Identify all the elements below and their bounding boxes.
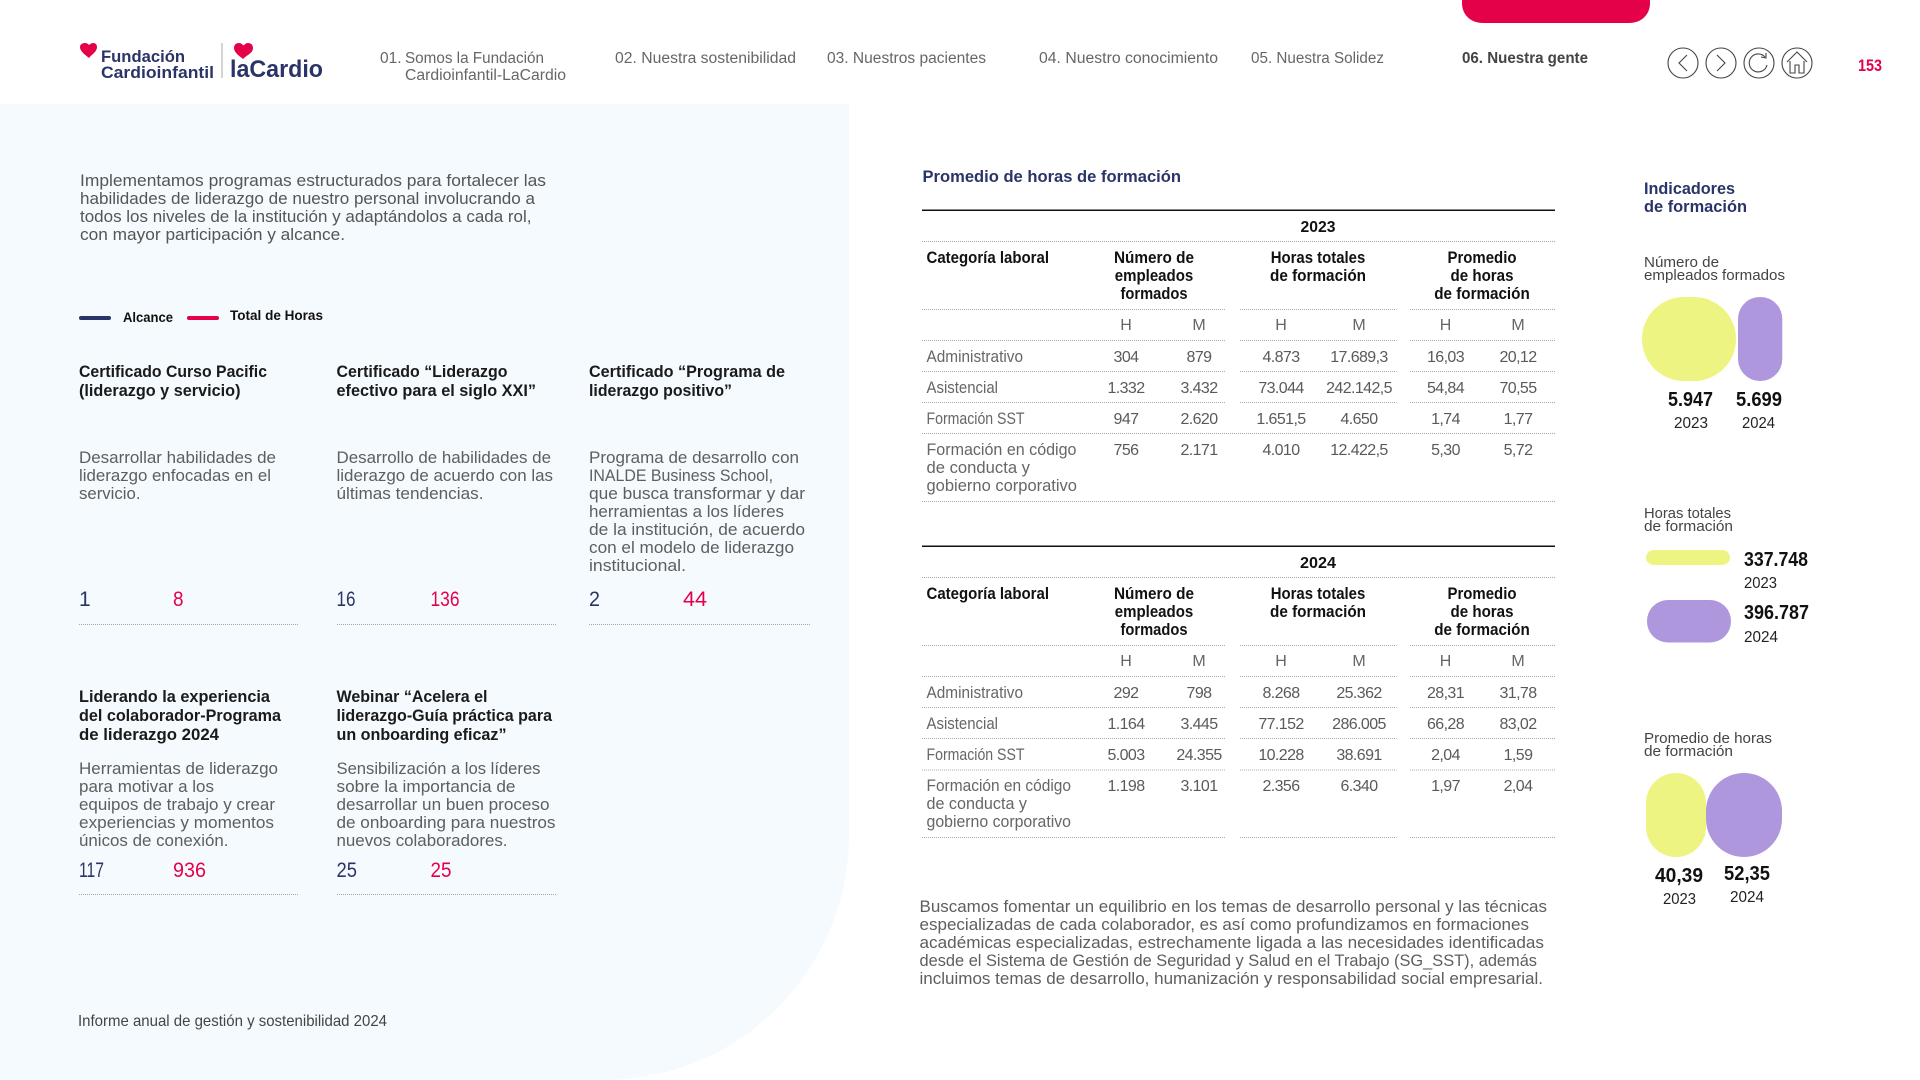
closing paragraph: Buscamos fomentar un equilibrio en los temas de desarrollo personal y las técnicas [920, 897, 1547, 916]
table 2023: empleados [1115, 267, 1193, 285]
table 2023: de formación [1434, 285, 1530, 303]
heading: indicadores [1644, 179, 1747, 216]
table 2023: de horas [1450, 267, 1514, 285]
table 2023: Número de [1114, 249, 1194, 267]
table 2023: H [1120, 317, 1132, 334]
logo: Fundación [101, 47, 185, 66]
table 2024: 1.198 [1107, 778, 1145, 795]
navigation menu: Somos la Fundación [405, 50, 544, 67]
navigation menu: Cardioinfantil-LaCardio [405, 67, 566, 84]
indicator: número de empleados formados: Número de [1644, 254, 1719, 271]
table 2023: M [1511, 317, 1525, 334]
program: Liderazgo positivo: de la institución, de acuerdo [589, 520, 805, 539]
table 2024: 3.445 [1180, 716, 1218, 733]
navigation menu: 06. Nuestra gente [1462, 50, 1588, 67]
heading: indicadores: de formación [1644, 197, 1747, 216]
program: Liderazgo positivo: liderazgo positivo” [589, 381, 732, 400]
indicator: horas totales de formación: de formación [1644, 518, 1733, 535]
table 2023: 70,55 [1499, 380, 1537, 397]
program: Liderazgo efectivo: Certificado “Liderazgo [336, 362, 508, 381]
indicator: horas totales de formación: 2024 [1744, 629, 1778, 646]
indicator: promedio de horas de formación: 40,39 [1655, 865, 1703, 887]
table 2023: formados [1120, 285, 1188, 303]
navigation menu: 02. Nuestra sostenibilidad [615, 50, 796, 67]
table 2024: 31,78 [1499, 685, 1537, 702]
navigation menu: 04. Nuestro conocimiento [1039, 50, 1218, 67]
table 2023: M [1352, 317, 1366, 334]
navigation menu: 03. Nuestros pacientes [827, 50, 986, 67]
heading: promedio: Promedio de horas de formación [922, 167, 1181, 186]
table 2024: 1,97 [1431, 778, 1461, 795]
table 2024: gobierno corporativo [926, 813, 1071, 831]
table 2024: H [1275, 653, 1287, 670]
table 2024: 77.152 [1258, 716, 1304, 733]
indicator: número de empleados formados: 5.947 [1668, 389, 1713, 411]
table 2023: 2.171 [1180, 442, 1218, 459]
page number: 153 [1858, 56, 1882, 75]
program: Liderazgo positivo: 44 [683, 588, 707, 611]
program: Liderando la experiencia: equipos de trabajo y crear [79, 795, 275, 814]
table 2024: 2024 [1300, 555, 1336, 572]
intro text: con mayor participación y alcance. [80, 225, 345, 244]
program: Webinar Acelera el liderazgo: 25 [336, 859, 357, 882]
closing paragraph: incluimos temas de desarrollo, humanización y responsabilidad social empresarial. [920, 969, 1543, 988]
program: Liderazgo positivo: que busca transformar y dar [589, 484, 805, 503]
indicator: promedio de horas de formación: Promedio de horas [1644, 730, 1772, 747]
table 2023: 242.142,5 [1326, 380, 1393, 397]
closing paragraph: académicas especializadas, estrechamente ligada a las necesidades identificadas [920, 933, 1544, 952]
program: Liderazgo efectivo: últimas tendencias. [336, 484, 484, 503]
table 2024: 38.691 [1336, 747, 1382, 764]
table 2023: gobierno corporativo [926, 477, 1077, 495]
table 2024: 292 [1114, 685, 1139, 702]
program: Curso Pacific: liderazgo enfocadas en el [79, 466, 271, 485]
program: Liderazgo positivo: con el modelo de liderazgo [589, 538, 794, 557]
table 2024: 24.355 [1176, 747, 1222, 764]
intro text: habilidades de liderazgo de nuestro personal involucrando a [80, 189, 536, 208]
table 2024: 2.356 [1262, 778, 1300, 795]
table 2023: 947 [1114, 411, 1139, 428]
table 2023: Administrativo [926, 348, 1023, 366]
footer: Informe anual de gestión y sostenibilidad 2024 [78, 1013, 387, 1030]
program: Webinar Acelera el liderazgo [336, 687, 556, 894]
program: Liderazgo positivo: Certificado “Programa de [589, 362, 785, 381]
table 2023: 17.689,3 [1330, 349, 1388, 366]
indicator: horas totales de formación [1644, 505, 1809, 646]
table 2024: 25.362 [1336, 685, 1382, 702]
program: Curso Pacific: 1 [79, 588, 91, 611]
table 2024: 2,04 [1504, 778, 1533, 795]
program: Liderando la experiencia: 936 [173, 859, 206, 882]
table 2023: de formación [1270, 267, 1366, 285]
table 2024: Categoría laboral [926, 585, 1049, 603]
indicator: promedio de horas de formación: 2024 [1730, 889, 1764, 906]
table 2023: 1,74 [1431, 411, 1461, 428]
table 2024: 8.268 [1262, 685, 1300, 702]
table 2023: 1,77 [1504, 411, 1533, 428]
indicator: horas totales de formación: Horas totales [1644, 505, 1731, 522]
program: Liderazgo efectivo: 16 [336, 588, 356, 611]
table 2024: 286.005 [1332, 716, 1387, 733]
table 2024: de formación [1270, 603, 1366, 621]
program: Liderando la experiencia: para motivar a los [79, 777, 214, 796]
table 2024: 66,28 [1427, 716, 1465, 733]
table 2024: formados [1120, 621, 1188, 639]
table 2023: Formación en código [926, 441, 1076, 459]
table 2024: 1.164 [1107, 716, 1145, 733]
program: Curso Pacific: (liderazgo y servicio) [79, 381, 240, 400]
program: Liderazgo efectivo: liderazgo de acuerdo con las [336, 466, 553, 485]
program: Liderando la experiencia: 117 [79, 859, 104, 882]
table 2024: Administrativo [926, 684, 1023, 702]
table 2024: 10.228 [1258, 747, 1304, 764]
table 2024: M [1511, 653, 1525, 670]
table 2023: 879 [1187, 349, 1212, 366]
heading: indicadores: Indicadores [1644, 179, 1735, 198]
program: Liderazgo positivo: INALDE Business School, [589, 466, 773, 485]
indicator: horas totales de formación: 337.748 [1744, 549, 1808, 571]
table 2024: 28,31 [1427, 685, 1465, 702]
closing paragraph: desde el Sistema de Gestión de Seguridad y Salud en el Trabajo (SG_SST), además [920, 951, 1537, 970]
program: Curso Pacific: 8 [173, 588, 184, 611]
table 2024: de conducta y [926, 795, 1028, 813]
program: Liderazgo efectivo: Desarrollo de habilidades de [336, 448, 551, 467]
table 2024: 5.003 [1107, 747, 1145, 764]
table 2023: 756 [1114, 442, 1139, 459]
table 2023: 1.332 [1107, 380, 1145, 397]
program: Liderando la experiencia: Herramientas de liderazgo [79, 759, 278, 778]
closing paragraph [920, 897, 1547, 988]
logo: Cardioinfantil [101, 63, 214, 82]
table 2024: 1,59 [1504, 747, 1533, 764]
program: Liderando la experiencia: experiencias y momentos [79, 813, 274, 832]
table 2024: Asistencial [926, 715, 998, 733]
legend [79, 308, 323, 325]
legend: Alcance [123, 310, 173, 325]
program: Liderando la experiencia: del colaborador-Programa [79, 706, 282, 725]
navigation menu: 01. [380, 50, 402, 67]
closing paragraph: especializadas de cada colaborador, es así como profundizamos en formaciones [920, 915, 1529, 934]
program: Webinar Acelera el liderazgo: sobre la importancia de [336, 777, 516, 796]
program: Liderazgo positivo: Programa de desarrollo con [589, 448, 799, 467]
navigation menu [380, 50, 1588, 84]
table 2023: 16,03 [1427, 349, 1465, 366]
navigation menu: 05. Nuestra Solidez [1251, 50, 1384, 67]
table 2024: de horas [1450, 603, 1514, 621]
indicator: promedio de horas de formación [1644, 730, 1782, 908]
table 2024: H [1120, 653, 1132, 670]
table 2024: M [1192, 653, 1206, 670]
program: Curso Pacific: Certificado Curso Pacific [79, 362, 267, 381]
table 2023 [922, 210, 1555, 502]
program: Webinar Acelera el liderazgo: desarrollar un buen proceso [336, 795, 550, 814]
indicator: número de empleados formados: empleados formados [1644, 267, 1785, 284]
table 2023: Categoría laboral [926, 249, 1049, 267]
program: Webinar Acelera el liderazgo: de onboarding para nuestros [336, 813, 556, 832]
program: Liderando la experiencia: únicos de conexión. [79, 831, 228, 850]
table 2024: 798 [1187, 685, 1212, 702]
table 2023: M [1192, 317, 1206, 334]
table 2023: 2.620 [1180, 411, 1218, 428]
table 2023: 4.873 [1262, 349, 1300, 366]
table 2023: 2023 [1300, 219, 1336, 236]
intro text: todos los niveles de la institución y adaptándolos a cada rol, [80, 207, 532, 226]
table 2024: Formación en código [926, 777, 1071, 795]
table 2023: 5,72 [1504, 442, 1533, 459]
program: Liderazgo efectivo [336, 362, 556, 624]
table 2024: Horas totales [1271, 585, 1365, 603]
intro text [80, 171, 546, 244]
table 2024: de formación [1434, 621, 1530, 639]
table 2023: 1.651,5 [1256, 411, 1306, 428]
table 2023: 4.650 [1340, 411, 1378, 428]
table 2024: 2,04 [1431, 747, 1461, 764]
program: Liderazgo efectivo: 136 [430, 588, 460, 611]
table 2024: H [1440, 653, 1451, 670]
program: Liderazgo positivo: 2 [589, 588, 600, 611]
indicator: número de empleados formados: 2023 [1674, 415, 1708, 432]
indicator: número de empleados formados: 2024 [1742, 415, 1775, 432]
program: Webinar Acelera el liderazgo: nuevos colaboradores. [336, 831, 508, 850]
program: Webinar Acelera el liderazgo: 25 [430, 859, 452, 882]
program: Liderazgo positivo: herramientas a los líderes [589, 502, 784, 521]
program: Liderando la experiencia: Liderando la experiencia [79, 687, 271, 706]
program: Curso Pacific [79, 362, 299, 624]
legend: Total de Horas [230, 308, 323, 323]
program: Liderando la experiencia [79, 687, 299, 894]
logo [80, 43, 323, 83]
intro text: Implementamos programas estructurados para fortalecer las [80, 171, 546, 190]
table 2023: Horas totales [1271, 249, 1365, 267]
program: Webinar Acelera el liderazgo: liderazgo-Guía práctica para [336, 706, 553, 725]
indicator: número de empleados formados [1642, 254, 1785, 432]
table 2024: Promedio [1448, 585, 1516, 603]
table 2023: Promedio [1448, 249, 1516, 267]
table 2024: M [1352, 653, 1366, 670]
icon: home [1782, 48, 1812, 78]
program: Curso Pacific: Desarrollar habilidades de [79, 448, 276, 467]
table 2024 [922, 546, 1555, 838]
table 2023: de conducta y [926, 459, 1031, 477]
program: Curso Pacific: servicio. [79, 484, 140, 503]
table 2023: 54,84 [1427, 380, 1465, 397]
program: Liderazgo efectivo: efectivo para el siglo XXI” [336, 381, 536, 400]
icon: previous [1668, 48, 1698, 78]
table 2024: 3.101 [1180, 778, 1218, 795]
program: Webinar Acelera el liderazgo: un onboarding eficaz” [336, 725, 506, 744]
table 2023: 5,30 [1431, 442, 1461, 459]
table 2023: 20,12 [1499, 349, 1537, 366]
table 2023: 3.432 [1180, 380, 1218, 397]
table 2024: empleados [1115, 603, 1193, 621]
indicator: número de empleados formados: 5.699 [1736, 389, 1782, 411]
table 2024: Número de [1114, 585, 1194, 603]
logo: laCardio [230, 56, 323, 83]
program: Webinar Acelera el liderazgo: Sensibilización a los líderes [336, 759, 540, 778]
table 2023: Formación SST [926, 410, 1024, 428]
table 2023: H [1440, 317, 1451, 334]
table 2023: 304 [1114, 349, 1139, 366]
icon: refresh [1744, 48, 1774, 78]
indicator: promedio de horas de formación: 52,35 [1724, 863, 1770, 885]
active section tab [1462, 0, 1650, 23]
indicator: promedio de horas de formación: 2023 [1663, 891, 1696, 908]
icon: next [1706, 48, 1736, 78]
table 2023: 73.044 [1258, 380, 1304, 397]
indicator: horas totales de formación: 396.787 [1744, 602, 1809, 624]
program: Webinar Acelera el liderazgo: Webinar “Acelera el [336, 687, 488, 706]
table 2024: 6.340 [1340, 778, 1378, 795]
table 2023: 4.010 [1262, 442, 1300, 459]
program: Liderando la experiencia: de liderazgo 2024 [79, 725, 220, 744]
table 2023: 12.422,5 [1330, 442, 1388, 459]
table 2024: Formación SST [926, 746, 1024, 764]
program: Liderazgo positivo: institucional. [589, 556, 686, 575]
table 2024: 83,02 [1499, 716, 1537, 733]
program: Liderazgo positivo [589, 362, 810, 624]
indicator: promedio de horas de formación: de formación [1644, 743, 1733, 760]
panel: left background [0, 104, 849, 1080]
table 2023: H [1275, 317, 1287, 334]
indicator: horas totales de formación: 2023 [1744, 575, 1777, 592]
table 2023: Asistencial [926, 379, 998, 397]
